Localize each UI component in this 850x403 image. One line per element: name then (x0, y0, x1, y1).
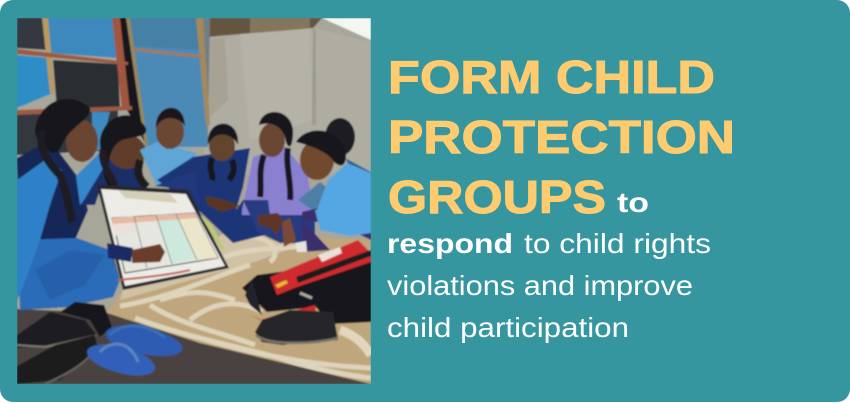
child 2 (76, 115, 147, 205)
heading: form child protection groups (388, 51, 735, 223)
child 1 arm and hand on the board (107, 243, 165, 263)
photo: ground (17, 309, 371, 384)
child 5 in purple (242, 112, 315, 247)
shoe on rug (255, 310, 338, 345)
child 4 (155, 124, 273, 243)
description text: respond (387, 228, 513, 259)
backpack (242, 240, 371, 324)
boy at right (295, 118, 371, 252)
blue flip-flops (86, 323, 184, 377)
description text (387, 187, 711, 343)
heading: form child protection groups: GROUPS (388, 171, 606, 223)
description text: child participation (387, 312, 629, 343)
text block: headline and description (387, 51, 735, 343)
pile of black shoes (17, 302, 112, 384)
child 3 (140, 108, 197, 187)
photo: corrugated metal sheets (17, 18, 210, 155)
photo: children in a child protection group meeting (17, 18, 371, 384)
description text: to child rights (524, 228, 711, 259)
group's chart board (97, 185, 229, 290)
heading: form child protection groups: PROTECTION (388, 111, 735, 163)
child 1 at left (17, 99, 120, 310)
photo backdrop: sky, trees and wall (17, 18, 371, 314)
heading: form child protection groups: FORM CHILD (388, 51, 715, 103)
description text: violations and improve (387, 270, 693, 301)
photo: rug (107, 233, 371, 384)
description text: to (617, 187, 649, 218)
